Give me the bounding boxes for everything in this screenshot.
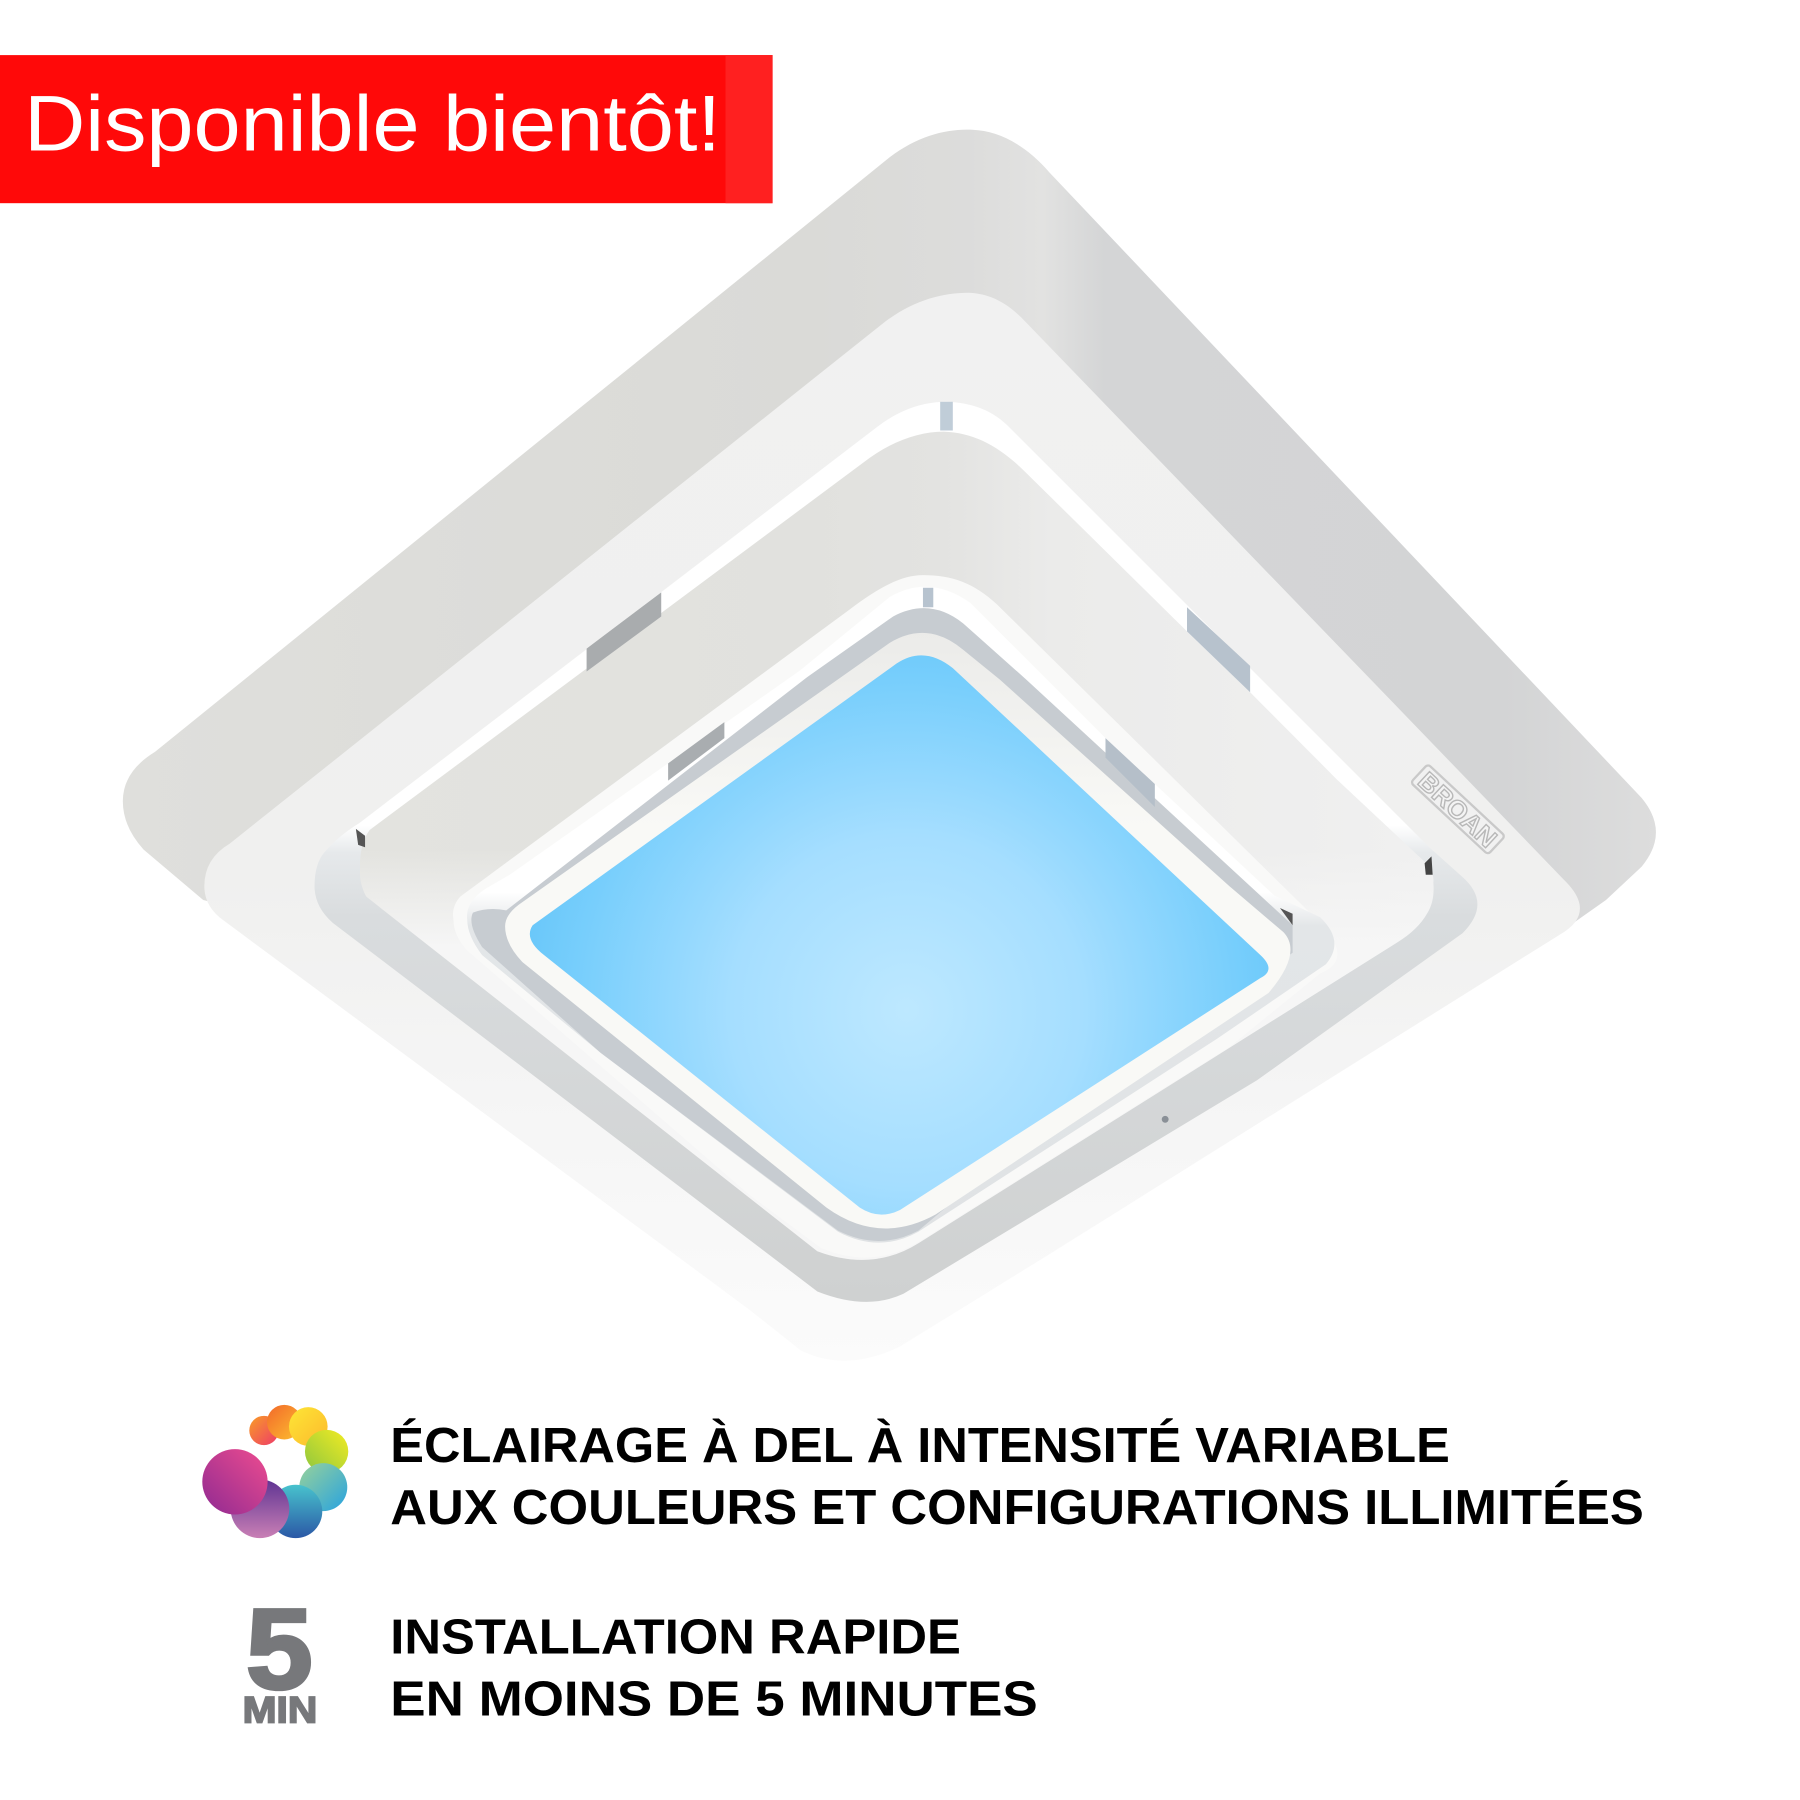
textured grey ring [471,608,1293,1241]
inner plate lower rim [360,432,1434,1260]
light slot recess [315,402,1477,1302]
blue lens [530,655,1268,1215]
badge: disponible bientôt [0,55,773,203]
outer housing [123,130,1656,1297]
feature text: lighting: AUX COULEURS ET CONFIGURATIONS ILLIMITÉES [390,1479,1644,1535]
mounting tabs [356,402,1433,1123]
feature text: lighting: ÉCLAIRAGE À DEL À INTENSITÉ VARIABLE [390,1417,1450,1473]
inner plate [360,432,1434,1260]
badge text: Disponible bientôt! [24,78,721,167]
brand plate: BROAN: BROAN [1412,767,1502,853]
white bezel [505,633,1290,1228]
feature text: installation: INSTALLATION RAPIDE [390,1610,961,1665]
feature text: lighting [390,1417,1644,1535]
opening lip [453,575,1337,1257]
feature text: installation: EN MOINS DE 5 MINUTES [390,1672,1038,1727]
icon: 5 min: MIN [243,1689,317,1730]
icon: 5 min: 5 [246,1587,313,1714]
feature text: installation [390,1610,1038,1727]
inner cavity [467,587,1334,1243]
icon: colour circles [202,1405,348,1538]
product: ceiling fan light [123,130,1656,1361]
middle plate [204,293,1580,1361]
